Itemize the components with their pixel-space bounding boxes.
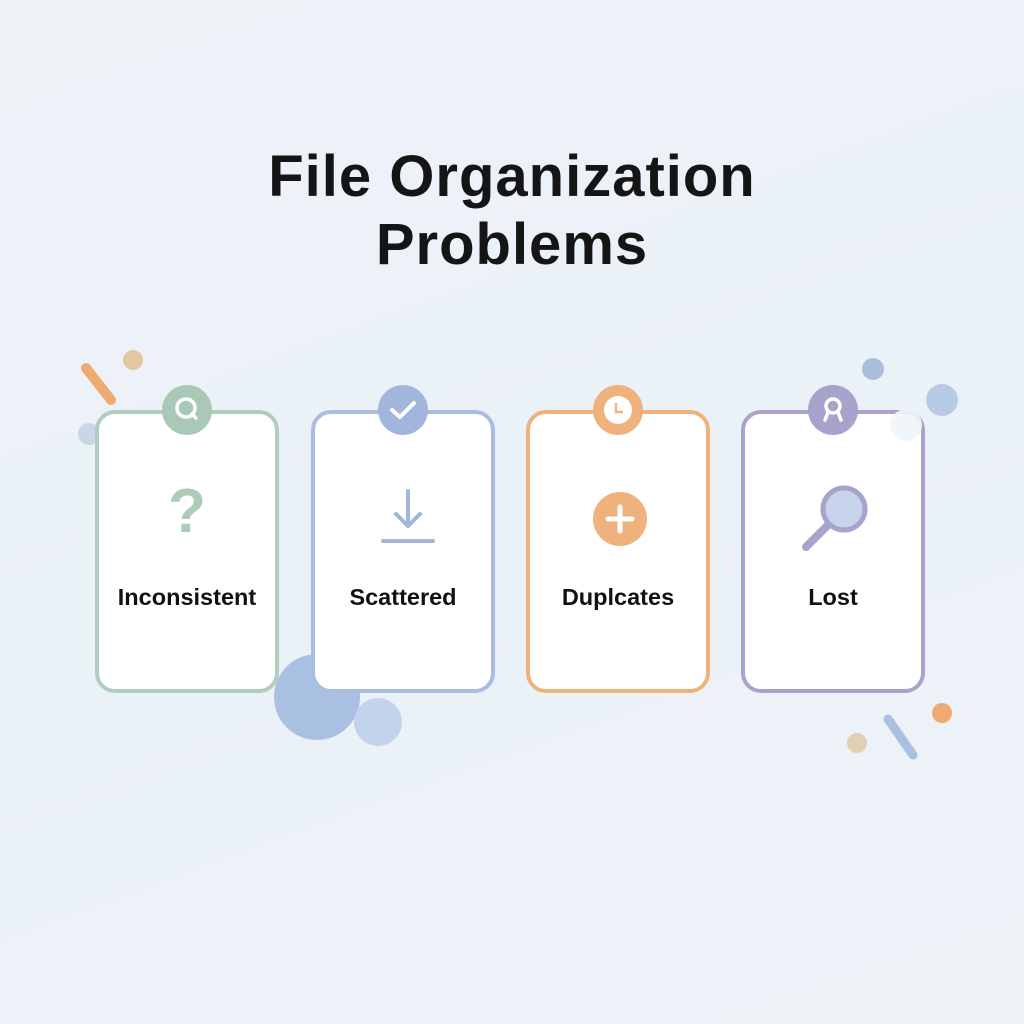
icon: plus circle <box>593 492 647 546</box>
icon: download arrow <box>381 489 435 543</box>
label: Lost <box>808 584 858 610</box>
decoration: white circle <box>890 409 922 441</box>
icon: clock badge <box>593 385 643 435</box>
icon: magnifier <box>802 486 868 551</box>
label: Duplcates <box>562 584 674 610</box>
label: Scattered <box>349 584 457 610</box>
title: Problems <box>376 212 648 277</box>
panel: duplicates <box>526 410 710 693</box>
panel: lost <box>741 410 925 693</box>
title <box>268 144 756 277</box>
icon: award badge <box>808 385 858 435</box>
icon: check badge <box>378 385 428 435</box>
panel: inconsistent <box>95 410 279 693</box>
icon: question mark: ? <box>168 477 206 546</box>
label: Inconsistent <box>118 584 256 610</box>
title: File Organization <box>268 144 756 209</box>
icon: search badge <box>162 385 212 435</box>
panel: scattered <box>311 410 495 693</box>
